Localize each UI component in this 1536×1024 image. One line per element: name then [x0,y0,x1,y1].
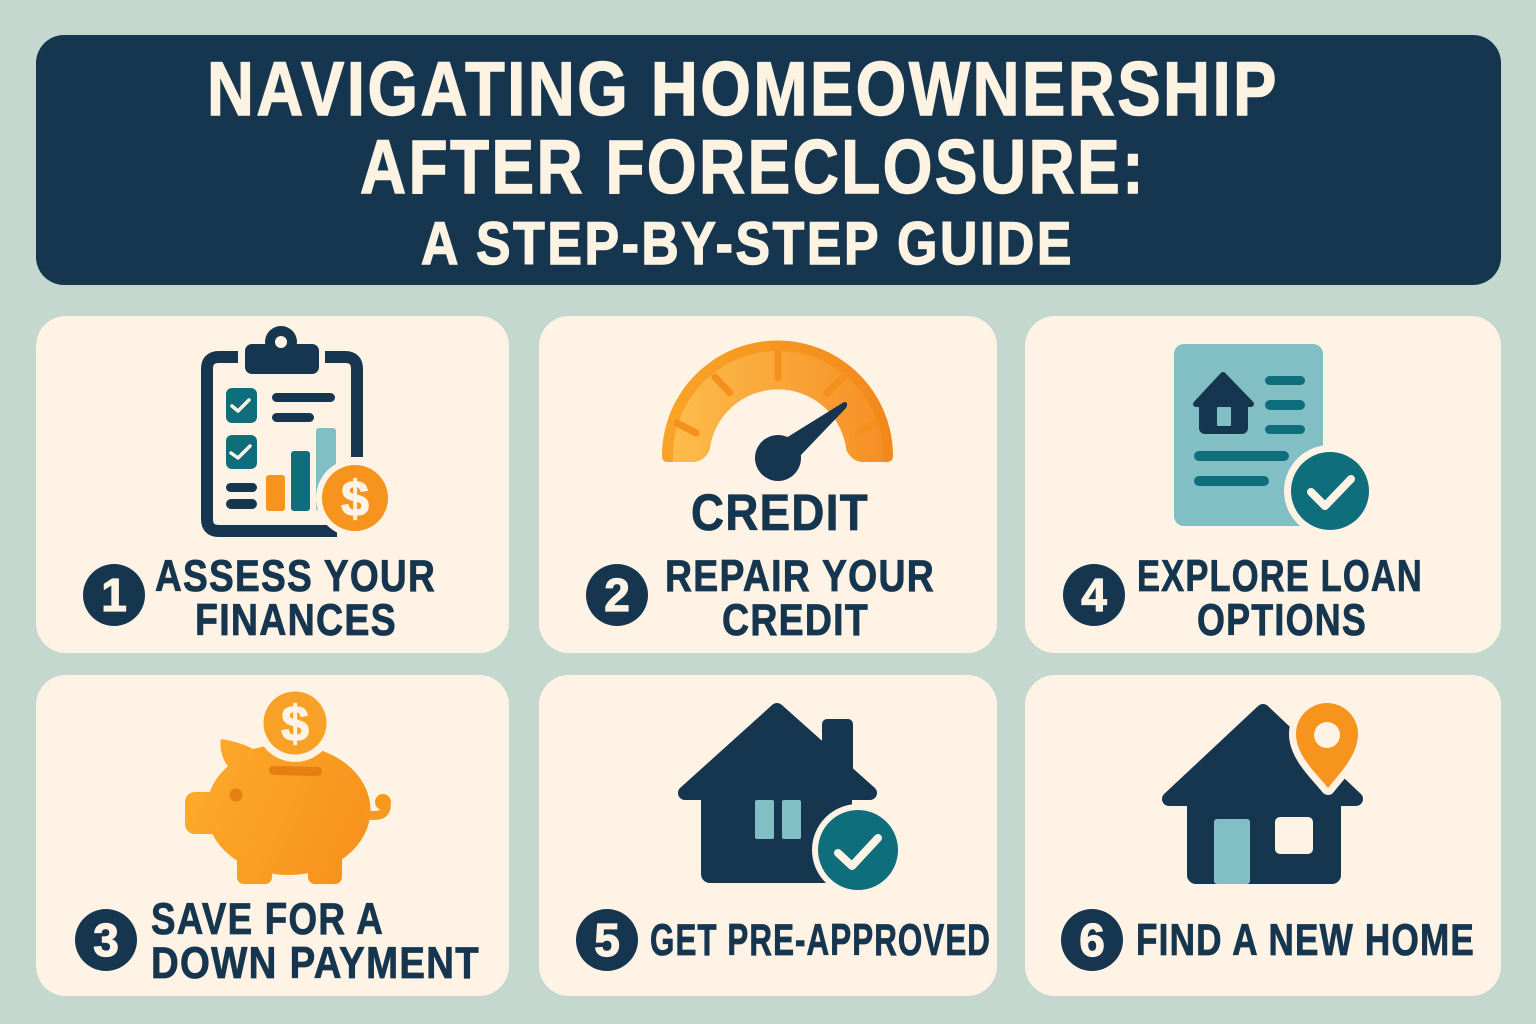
title banner [36,35,1501,285]
label: assess your finances [155,552,436,645]
icon: house with location pin [1169,703,1358,884]
step number 2 [586,564,648,626]
step number 1: 1 [101,569,127,621]
panel: step 5 get pre-approved [539,675,997,996]
icon: clipboard with chart and coin: $ [341,471,369,527]
step number 5: 5 [594,914,620,966]
panel: step 6 find a new home [1025,675,1501,996]
icon: credit gauge [662,340,893,481]
step number 1 [83,564,145,626]
step number 2: 2 [604,569,630,621]
step number 6: 6 [1079,914,1105,966]
step number 3: 3 [93,914,119,966]
icon: clipboard with chart and coin [207,326,394,537]
label: assess your finances: FINANCES [195,596,397,645]
step number 5 [576,909,638,971]
panel: step 1 assess your finances [36,316,509,653]
label: explore loan options [1137,552,1423,645]
title banner: NAVIGATING HOMEOWNERSHIP [207,47,1279,132]
panel: step 2 repair your credit [539,316,997,653]
title banner: A STEP-BY-STEP GUIDE [421,210,1074,277]
icon: loan document with check [1174,344,1376,537]
label: repair your credit: REPAIR YOUR [665,552,935,601]
label: repair your credit: CREDIT [722,596,869,645]
step number 4 [1063,564,1125,626]
title banner: AFTER FORECLOSURE: [360,125,1146,210]
panel: step 3 save for a down payment [36,675,509,996]
icon: piggy bank with coin: $ [281,696,309,752]
label: get pre-approved: GET PRE-APPROVED [650,916,991,965]
icon: piggy bank with coin [185,684,391,884]
label: explore loan options: OPTIONS [1197,596,1367,645]
label: assess your finances: ASSESS YOUR [155,552,436,601]
label: save for a down payment: SAVE FOR A [151,895,384,944]
label: save for a down payment [151,895,480,988]
label: save for a down payment: DOWN PAYMENT [151,939,480,988]
panel: step 4 explore loan options [1025,316,1501,653]
step number 4: 4 [1081,569,1107,621]
label: repair your credit [665,552,935,645]
icon: house with check [685,710,904,896]
step number 6 [1061,909,1123,971]
gauge label: CREDIT [691,484,869,541]
label: explore loan options: EXPLORE LOAN [1137,552,1423,601]
step number 3 [75,909,137,971]
